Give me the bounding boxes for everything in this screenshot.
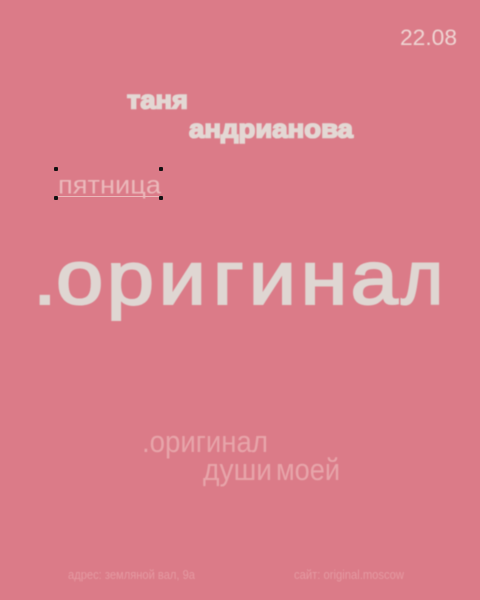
underline bbox=[56, 196, 161, 197]
selection handles bbox=[54, 167, 163, 200]
selected label: day of week bbox=[54, 167, 163, 200]
subtitle line two bbox=[203, 452, 340, 487]
speaker last name: андрианова bbox=[189, 114, 354, 144]
main title letters: .оригина bbox=[33, 236, 398, 321]
main title final letter: л bbox=[401, 235, 443, 320]
subtitle word two: моей bbox=[276, 452, 340, 487]
speaker first name: таня bbox=[127, 84, 188, 114]
website: сайт: original.moscow bbox=[294, 568, 405, 582]
subtitle word one: души bbox=[203, 452, 272, 487]
address: адрес: земляной вал, 9а bbox=[68, 568, 195, 582]
subtitle line one: .оригинал bbox=[142, 424, 268, 459]
weekday text: пятница bbox=[58, 172, 161, 200]
date: 22.08 bbox=[400, 25, 457, 50]
main title bbox=[33, 235, 443, 321]
